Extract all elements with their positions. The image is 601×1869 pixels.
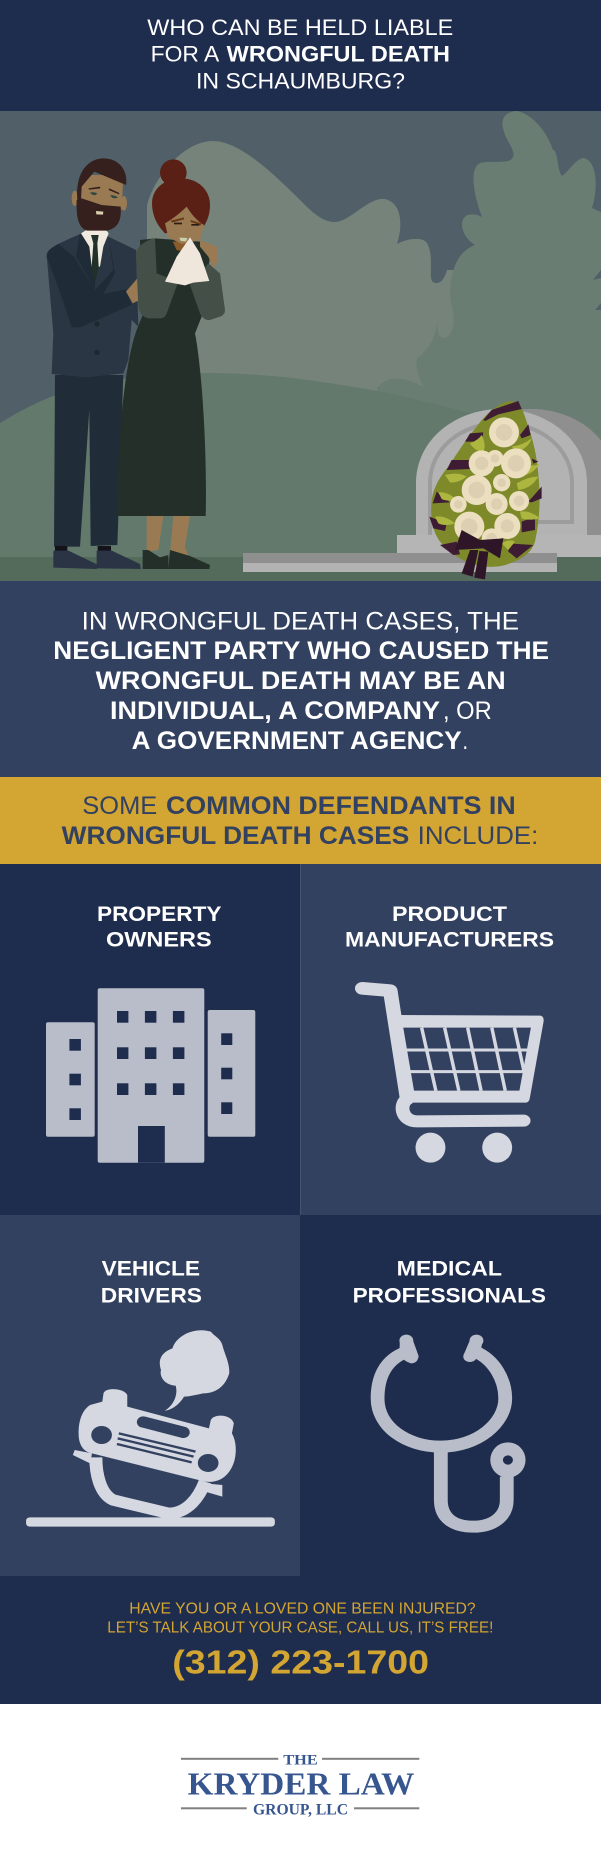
heading: property owners: PROPERTY — [97, 903, 222, 926]
intro text panel — [0, 581, 601, 777]
intro text: . — [462, 727, 468, 755]
icon: shopping cart — [362, 988, 544, 1163]
banner text: INCLUDE: — [418, 822, 538, 850]
call to action text: HAVE YOU OR A LOVED ONE BEEN INJURED? — [129, 1600, 476, 1617]
title — [147, 15, 453, 93]
header panel — [0, 0, 601, 111]
title: WHO CAN BE HELD LIABLE — [147, 15, 453, 40]
intro text: IN WRONGFUL DEATH CASES, THE — [82, 607, 519, 635]
heading: property owners — [97, 903, 222, 952]
call to action text: LET’S TALK ABOUT YOUR CASE, CALL US, IT’S FREE! — [107, 1619, 493, 1636]
title: FOR A — [151, 42, 220, 67]
phone number: (312) 223-1700 — [172, 1643, 429, 1680]
banner text — [62, 792, 538, 850]
call to action text — [107, 1600, 493, 1636]
title: IN SCHAUMBURG? — [196, 68, 405, 93]
heading: medical professionals — [353, 1257, 546, 1307]
funeral wreath — [429, 401, 542, 579]
roses — [450, 417, 531, 548]
background bush — [147, 141, 470, 430]
intro text — [53, 607, 549, 755]
foreground hill — [0, 373, 601, 557]
heading: product manufacturers: MANUFACTURERS — [345, 929, 554, 952]
heading: product manufacturers: PRODUCT — [392, 903, 507, 926]
banner text: WRONGFUL DEATH CASES — [62, 822, 409, 850]
gravestone — [243, 409, 601, 572]
leaves — [435, 435, 540, 550]
icon: buildings — [46, 988, 255, 1163]
logo — [0, 1704, 601, 1869]
heading: vehicle drivers — [101, 1257, 202, 1307]
panel: property owners — [0, 864, 300, 1215]
woman in dress — [117, 159, 225, 569]
banner text: COMMON DEFENDANTS IN — [166, 792, 516, 820]
illustration panel: mourners at a grave — [0, 111, 601, 581]
man in suit — [47, 158, 162, 569]
heading: property owners: OWNERS — [106, 929, 212, 952]
icon: stethoscope — [378, 1335, 526, 1527]
background tree — [377, 111, 601, 500]
ribbon stripes — [429, 401, 542, 558]
black bow — [455, 530, 503, 579]
footer call to action — [0, 1576, 601, 1704]
intro text: A GOVERNMENT AGENCY — [132, 727, 462, 755]
intro text: WRONGFUL DEATH MAY BE AN — [96, 667, 506, 695]
logo: GROUP, LLC — [253, 1801, 348, 1818]
logo: THE — [283, 1752, 318, 1768]
title: WRONGFUL DEATH — [227, 42, 450, 67]
intro text: , OR — [443, 697, 492, 725]
heading: medical professionals: MEDICAL — [397, 1257, 502, 1280]
ground strip — [0, 557, 601, 581]
banner text: SOME — [82, 792, 157, 820]
panel: product manufacturers — [300, 864, 601, 1215]
heading: medical professionals: PROFESSIONALS — [353, 1284, 546, 1307]
panel: vehicle drivers — [0, 1215, 300, 1576]
heading: vehicle drivers: VEHICLE — [102, 1257, 200, 1280]
icon: overturned car with smoke — [26, 1330, 275, 1527]
logo: KRYDER LAW — [188, 1765, 414, 1801]
panel: medical professionals — [300, 1215, 601, 1576]
intro text: NEGLIGENT PARTY WHO CAUSED THE — [53, 637, 549, 665]
gold banner — [0, 777, 601, 864]
heading: product manufacturers — [345, 903, 554, 952]
intro text: INDIVIDUAL, A COMPANY — [110, 697, 440, 725]
heading: vehicle drivers: DRIVERS — [101, 1284, 202, 1307]
